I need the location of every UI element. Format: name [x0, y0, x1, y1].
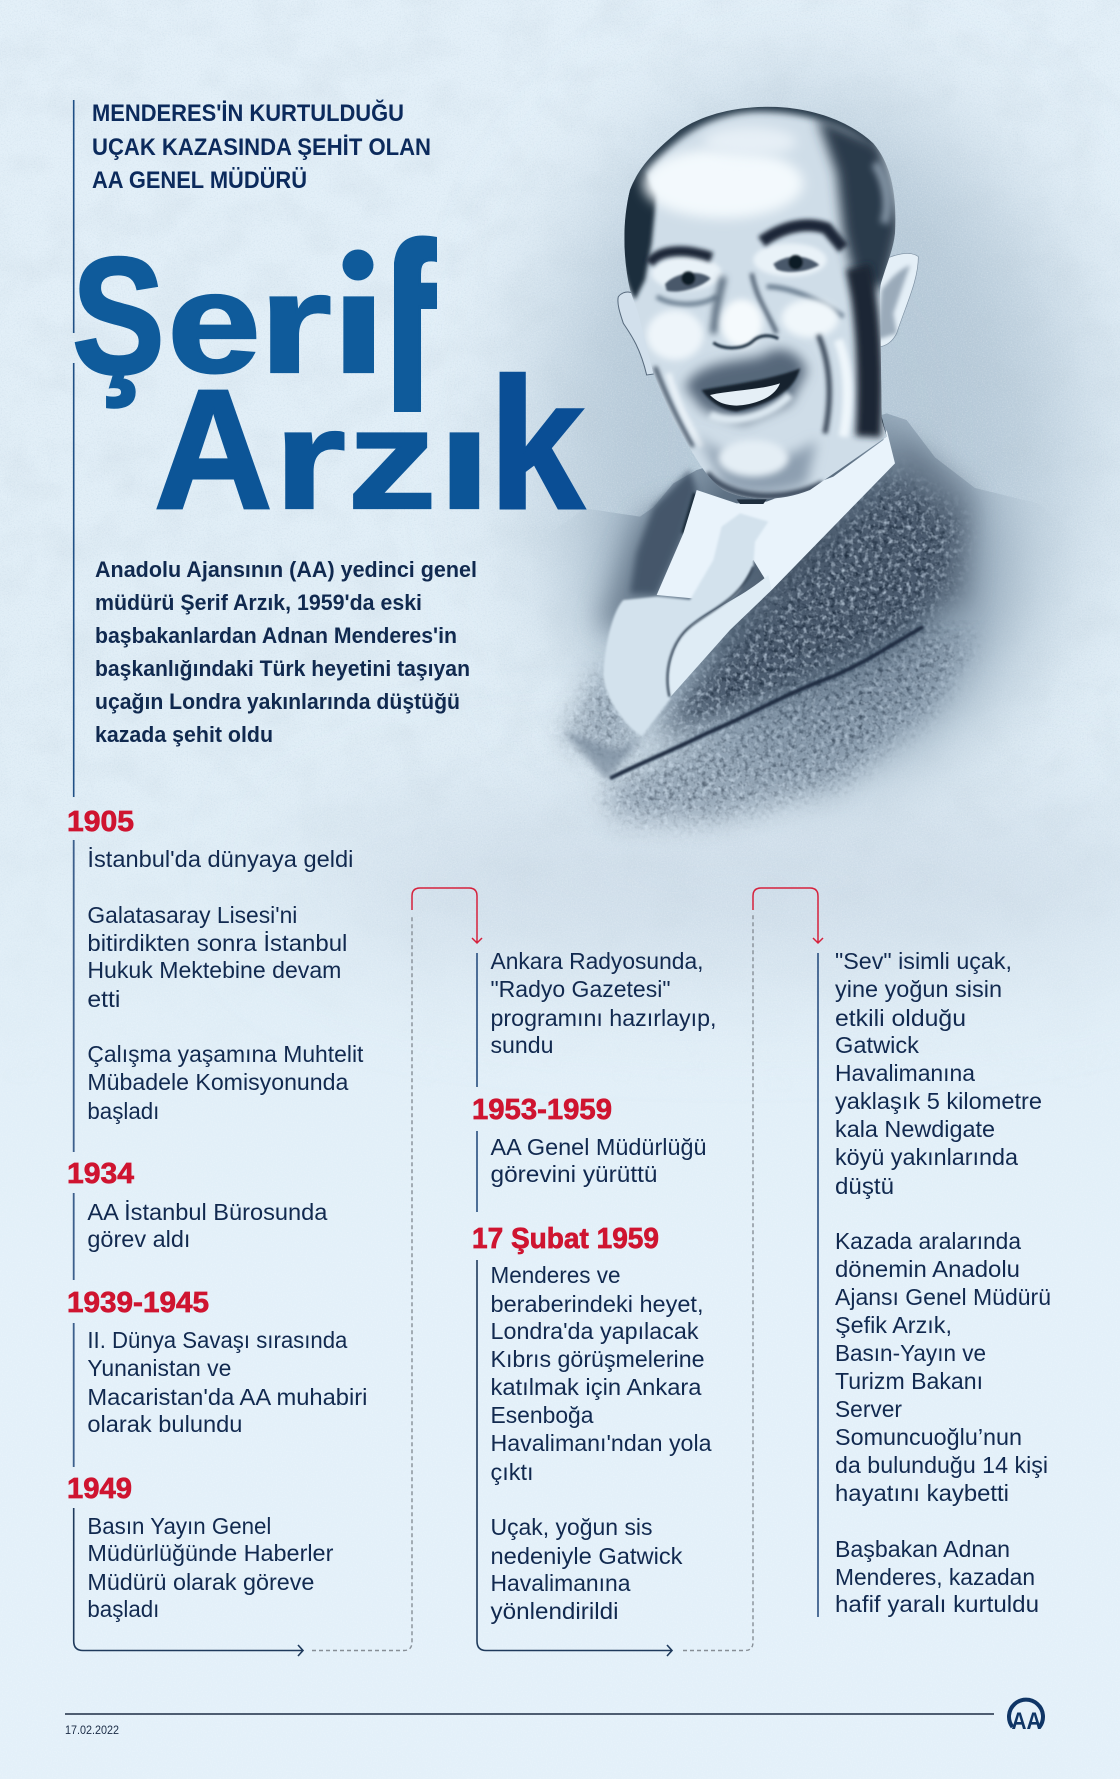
text 17 Şubat 1959: Havalimanı'ndan yola: [490, 1430, 712, 1456]
bar radio: [476, 953, 478, 1087]
year 1939-1945: 1939-1945: [67, 1287, 209, 1319]
year 1905: 1905: [67, 806, 134, 838]
text victims: Somuncuoğlu’nun: [835, 1424, 1022, 1450]
text 1939-1945: II. Dünya Savaşı sırasında: [87, 1327, 348, 1353]
shirt collar: [657, 430, 895, 600]
tie under knot: [737, 499, 767, 504]
title: Şerif: e: [167, 244, 261, 403]
text victims: Şefik Arzık,: [835, 1312, 952, 1338]
lapel under shadow: [563, 730, 642, 780]
mouth: [702, 368, 800, 412]
right ear: [873, 253, 918, 347]
left eye bag: [657, 297, 717, 304]
text 1953-1959: görevini yürüttü: [490, 1161, 658, 1187]
bar column 3: [817, 953, 819, 1617]
timeline column 1: [67, 806, 367, 1656]
text crash: "Sev" isimli uçak,: [835, 948, 1012, 974]
right shoulder shade: [897, 433, 973, 607]
top-left vertical rule: [73, 100, 75, 797]
title: Şerif: [72, 194, 439, 464]
text 1905: [87, 846, 364, 1124]
left ear: [618, 292, 654, 375]
dark tweed lapel: [646, 468, 971, 750]
text crash: [835, 948, 1042, 1199]
chin light: [718, 440, 788, 477]
left cheek fold: [655, 367, 693, 447]
text 17 Şubat 1959: Londra'da yapılacak: [490, 1318, 699, 1344]
text victims: dönemin Anadolu: [835, 1256, 1020, 1282]
text 1905: başladı: [87, 1098, 159, 1124]
hair top band: [627, 104, 877, 200]
portrait: jacket and shirt: [550, 414, 1040, 838]
bar 1953-1959: [476, 1131, 478, 1212]
text 1905: Hukuk Mektebine devam: [87, 957, 341, 983]
neck shadow: [797, 317, 887, 493]
text 1939-1945: [87, 1327, 367, 1437]
text 1939-1945: Macaristan'da AA muhabiri: [87, 1384, 367, 1410]
lower tweed: [550, 622, 980, 838]
tie fold line: [667, 567, 753, 697]
text 17 Şubat 1959: Havalimanına: [490, 1570, 631, 1596]
text 1953-1959: AA Genel Müdürlüğü: [490, 1134, 706, 1160]
lapel seam: [610, 627, 923, 778]
text victims: Turizm Bakanı: [835, 1368, 983, 1394]
text radio: "Radyo Gazetesi": [490, 976, 670, 1002]
left eyebrow: [649, 251, 712, 263]
right ear shading: [877, 265, 910, 340]
text 17 Şubat 1959: katılmak için Ankara: [490, 1374, 702, 1400]
jaw shadow: [707, 473, 823, 496]
intro paragraph: başbakanlardan Adnan Menderes'in: [95, 623, 457, 648]
title: Arzık: ı: [438, 380, 491, 538]
text 1905: etti: [87, 986, 120, 1012]
text crash: kala Newdigate: [835, 1116, 995, 1142]
left cheek fold light: [668, 373, 702, 447]
hair right: [817, 117, 900, 290]
chin stubble: [697, 433, 817, 493]
intro paragraph: müdürü Şerif Arzık, 1959'da eski: [95, 590, 422, 615]
left cheek light: [647, 310, 703, 360]
text 1905: Galatasaray Lisesi'ni: [87, 902, 297, 928]
text 17 Şubat 1959: nedeniyle Gatwick: [490, 1543, 683, 1569]
under-eye left light: [652, 257, 722, 290]
tie blade: [603, 513, 768, 737]
nose bridge right shadow: [752, 273, 777, 333]
title: Arzık: z: [347, 382, 436, 539]
jacket silhouette: [473, 413, 1120, 887]
icon: AA logo: [1009, 1700, 1043, 1735]
text crash: düştü: [835, 1173, 894, 1199]
intro paragraph: başkanlığındaki Türk heyetini taşıyan: [95, 656, 470, 681]
text prime minister: Başbakan Adnan: [835, 1536, 1010, 1562]
text crash: köyü yakınlarında: [835, 1144, 1018, 1170]
left shoulder shade: [597, 497, 680, 633]
date: 17.02.2022: [65, 1725, 119, 1737]
title: Arzık: [154, 339, 585, 548]
text 1934: AA İstanbul Bürosunda: [87, 1199, 328, 1225]
teeth: [710, 383, 780, 406]
dashed connector 1 to 2: [312, 915, 412, 1650]
text 1949: [87, 1513, 334, 1622]
text crash: yaklaşık 5 kilometre: [835, 1088, 1042, 1114]
text radio: Ankara Radyosunda,: [490, 948, 704, 974]
right cheek fold light: [838, 340, 847, 437]
title: Şerif: Ş: [72, 223, 165, 409]
text 1934: [87, 1199, 328, 1252]
text victims: [835, 1228, 1051, 1506]
text 1905: Mübadele Komisyonunda: [87, 1069, 349, 1095]
text 1905: İstanbul'da dünyaya geldi: [87, 846, 353, 872]
year 1953-1959: 1953-1959: [472, 1094, 612, 1126]
right eye bags: [767, 287, 843, 317]
subheading: UÇAK KAZASINDA ŞEHİT OLAN: [92, 134, 431, 161]
text 17 Şubat 1959: Esenboğa: [490, 1402, 594, 1428]
dark collar fold: [683, 493, 695, 533]
red arrow 1 to 2: [412, 888, 482, 943]
left collar shadow: [630, 470, 697, 595]
text radio: [490, 948, 716, 1058]
right eyebrow: [762, 225, 843, 248]
year 1934: 1934: [67, 1158, 134, 1190]
text prime minister: [835, 1536, 1039, 1617]
title: Arzık: A: [154, 355, 272, 545]
title: Şerif: r: [259, 246, 332, 403]
text crash: etkili olduğu: [835, 1005, 966, 1031]
intro paragraph: kazada şehit oldu: [95, 722, 273, 747]
hair right highlight: [875, 163, 887, 223]
text victims: hayatını kaybetti: [835, 1480, 1009, 1506]
right eye: [773, 255, 819, 272]
nose light: [721, 299, 762, 347]
nose bridge left shadow: [713, 277, 723, 333]
right cheek light: [782, 299, 838, 338]
forehead upper light: [703, 127, 797, 157]
background paper texture: [0, 0, 1120, 1034]
title: Şerif: f: [378, 194, 439, 464]
text 1905: Çalışma yaşamına Muhtelit: [87, 1041, 364, 1067]
text victims: Server: [835, 1396, 902, 1422]
dark side of neck: [858, 267, 870, 437]
text 17 Şubat 1959: beraberindeki heyet,: [490, 1291, 704, 1317]
skull and face shading group: [624, 106, 896, 499]
year 17 Şubat 1959: 17 Şubat 1959: [472, 1223, 659, 1255]
text 17 Şubat 1959: [490, 1262, 712, 1624]
forehead light: [643, 148, 803, 218]
text crash: Havalimanına: [835, 1060, 975, 1086]
right cheek fold dark: [818, 335, 829, 433]
text 1939-1945: Yunanistan ve: [87, 1355, 231, 1381]
timeline column 2: [472, 948, 716, 1656]
text 1949: başladı: [87, 1596, 159, 1622]
intro paragraph: [95, 557, 477, 747]
portrait: head: [617, 106, 919, 499]
icon: AA logo: AA: [1012, 1708, 1042, 1735]
arrow: bottom of column 2: [477, 1260, 672, 1656]
text 1953-1959: [490, 1134, 706, 1187]
tie tail: [669, 575, 772, 697]
bar 1939-1945: [73, 1323, 75, 1467]
text victims: da bulunduğu 14 kişi: [835, 1452, 1048, 1478]
footer rule: [65, 1713, 994, 1715]
text crash: Gatwick: [835, 1032, 920, 1058]
intro paragraph: Anadolu Ajansının (AA) yedinci genel: [95, 557, 477, 582]
text 17 Şubat 1959: Uçak, yoğun sis: [490, 1514, 652, 1540]
text 17 Şubat 1959: Kıbrıs görüşmelerine: [490, 1346, 704, 1372]
text 1934: görev aldı: [87, 1226, 190, 1252]
text radio: sundu: [490, 1032, 554, 1058]
red arrow 2 to 3: [753, 888, 823, 943]
text 1949: Müdürlüğünde Haberler: [87, 1540, 334, 1566]
subheading: AA GENEL MÜDÜRÜ: [92, 167, 307, 194]
text victims: Basın-Yayın ve: [835, 1340, 986, 1366]
text 1905: bitirdikten sonra İstanbul: [87, 930, 347, 956]
skull: [630, 114, 896, 499]
bar 1905: [73, 840, 75, 1152]
dashed connector 2 to 3: [683, 915, 753, 1650]
text 1939-1945: olarak bulundu: [87, 1411, 242, 1437]
text victims: Kazada aralarında: [835, 1228, 1021, 1254]
timeline column 3: [818, 948, 1051, 1617]
lower lip: [710, 395, 790, 419]
text 17 Şubat 1959: Menderes ve: [490, 1262, 620, 1288]
hair left: [619, 170, 657, 300]
nose bottom line: [713, 336, 778, 348]
left eye: [665, 271, 711, 292]
year 1949: 1949: [67, 1473, 132, 1505]
text 17 Şubat 1959: çıktı: [490, 1459, 534, 1485]
text victims: Ajansı Genel Müdürü: [835, 1284, 1051, 1310]
text prime minister: Menderes, kazadan: [835, 1564, 1035, 1590]
text prime minister: hafif yaralı kurtuldu: [835, 1591, 1039, 1617]
moustache and mouth shadow: [685, 349, 807, 423]
text 17 Şubat 1959: yönlendirildi: [490, 1598, 618, 1624]
under-eye right light: [753, 243, 827, 277]
text 1949: Basın Yayın Genel: [87, 1513, 271, 1539]
bar 1934: [73, 1193, 75, 1280]
subheading: MENDERES'İN KURTULDUĞU: [92, 99, 404, 127]
title: Arzık: r: [274, 380, 346, 538]
text 1949: Müdürü olarak göreve: [87, 1569, 314, 1595]
text crash: yine yoğun sisin: [835, 976, 1002, 1002]
intro paragraph: uçağın Londra yakınlarında düştüğü: [95, 689, 460, 714]
subheading: [92, 99, 431, 194]
text radio: programını hazırlayıp,: [490, 1005, 716, 1031]
arrow: bottom of column 1: [74, 1508, 303, 1656]
title: Şerif: i: [331, 244, 387, 402]
title: Arzık: k: [489, 339, 585, 548]
